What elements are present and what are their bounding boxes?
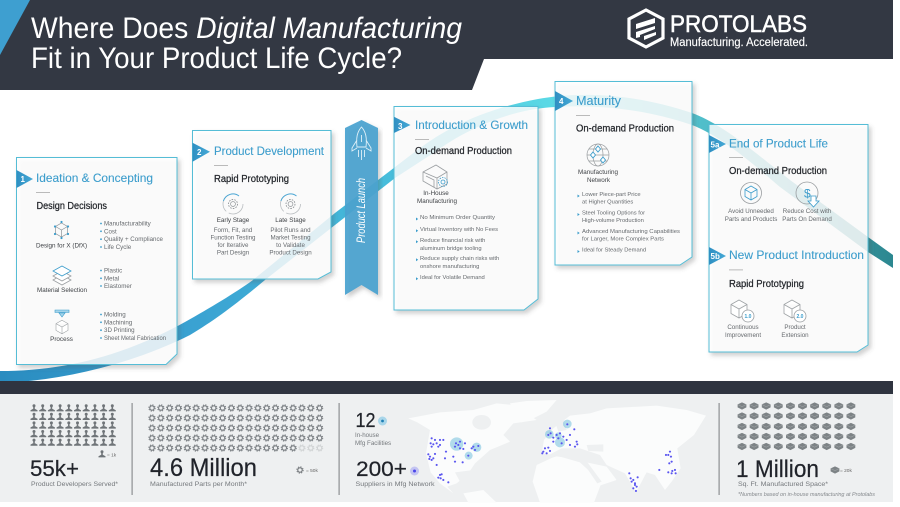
list: processes: 3D Printing [104, 327, 135, 334]
pictogram: building grid [738, 402, 855, 450]
step marker 1: 1 [20, 175, 26, 184]
list: benefits: aluminum bridge tooling [420, 246, 482, 252]
label: in-house manufacturing [417, 190, 457, 205]
heading: new product introduction: New Product Introduction [729, 248, 864, 262]
list: benefits: at Higher Quantities [582, 200, 633, 206]
list: design for x [100, 220, 164, 251]
captions: prototyping uses: Continuous [727, 324, 759, 331]
icon: network globe [587, 144, 609, 166]
step marker 4: 4 [559, 97, 564, 106]
text: early stage: for Iterative [218, 242, 249, 249]
map water: seas and bays [455, 415, 655, 495]
legend: fifty thousand: = 50k [306, 468, 318, 474]
captions: prototyping uses: Extension [781, 332, 809, 339]
text: early stage: Form, Fit, and [214, 227, 253, 234]
pictogram: gear grid [149, 405, 323, 451]
list: benefits: Steel Tooling Options for [582, 210, 645, 216]
list: benefits: No Minimum Order Quantity [420, 215, 495, 221]
icon: product extension cube: 2.0 [797, 314, 804, 320]
label: process: Process [50, 336, 73, 343]
list: processes: Machining [104, 319, 133, 326]
subheading: On-demand Production [576, 124, 674, 134]
icon: reduce cost [796, 182, 819, 207]
icon: product extension cube [784, 300, 806, 322]
list: materials [100, 268, 132, 290]
icon: reduce cost: $ [804, 186, 811, 200]
legend: twenty thousand: = 20k [840, 468, 852, 474]
title [31, 12, 463, 75]
text: late stage: Late Stage [275, 217, 306, 224]
figure: 4.6 Million [150, 454, 257, 482]
list: benefits: onshore manufacturing [420, 264, 479, 270]
list: benefits: Lower Piece-part Price [582, 192, 641, 198]
list: benefits: High-volume Production [582, 218, 644, 224]
figure: 12 [356, 410, 376, 432]
step marker 3 [394, 117, 410, 133]
heading: Ideation & Concepting [36, 171, 153, 185]
life cycle curve [0, 95, 893, 383]
icon: late stage cycle [280, 194, 300, 214]
panel: maturity [555, 82, 692, 265]
list: benefits: Ideal for Steady Demand [582, 248, 646, 254]
text: late stage: Product Design [269, 250, 312, 256]
text: late stage: Market Testing [270, 234, 311, 242]
Protolabs logo: PROTOLABS [670, 11, 807, 38]
captions: on-demand benefits: Parts and Products [725, 216, 777, 223]
header blue corner accent [0, 0, 30, 55]
captions: on-demand benefits: Reduce Cost with [783, 208, 832, 215]
list: materials: Metal [104, 275, 119, 282]
heading: Introduction & Growth [415, 118, 528, 132]
text: late stage [269, 217, 312, 256]
list: materials: Elastomer [104, 283, 132, 290]
list: benefits: Advanced Manufacturing Capabilities [582, 229, 680, 235]
list: benefits: Ideal for Volatile Demand [420, 275, 485, 281]
step marker 3: 3 [398, 122, 403, 131]
text: early stage: Part Design [217, 250, 250, 256]
world map [408, 400, 706, 503]
list: materials: Plastic [104, 268, 122, 274]
in-house facility halos [450, 420, 572, 460]
step marker 1 [16, 170, 33, 188]
subheading: On-demand Production [415, 146, 512, 157]
stats band [0, 381, 893, 502]
list: processes: Molding [104, 312, 126, 318]
list: benefits: for Larger, More Complex Parts [582, 236, 664, 242]
captions: on-demand benefits [725, 208, 832, 223]
list: benefits: Reduce financial risk with [420, 238, 485, 244]
list: design for x: Cost [104, 228, 117, 235]
legend dot: supplier [410, 466, 419, 476]
step marker 5a [709, 135, 726, 153]
icon: continuous improvement cube: 1.0 [745, 314, 752, 320]
caption: Sq. Ft. Manufactured Space* [738, 481, 829, 488]
Protolabs logo: Manufacturing. Accelerated. [670, 37, 808, 49]
label: in-house manufacturing: In-House [423, 190, 449, 197]
supplier dots [427, 423, 677, 492]
list: processes [100, 312, 167, 342]
list: design for x: Manufacturability [104, 220, 152, 228]
subheading: on-demand production: On-demand Production [729, 166, 827, 177]
legend: fifty thousand [297, 467, 318, 474]
icon: factory [423, 165, 448, 189]
caption [355, 432, 391, 447]
subheading: Design Decisions [36, 201, 107, 212]
icon: continuous improvement cube [731, 300, 754, 322]
figure: 1 Million [736, 456, 819, 483]
caption: Product Developers Served* [31, 481, 119, 488]
caption: In-house [355, 432, 380, 439]
heading: Maturity [576, 93, 621, 108]
step marker 5b [709, 247, 726, 265]
legend: one thousand: = 1k [107, 452, 117, 458]
footnote: *Numbers based on in-house manufacturing at Protolabs [738, 492, 876, 498]
title: Fit in Your Product Life Cycle? [31, 42, 402, 75]
label: in-house manufacturing: Manufacturing [417, 198, 457, 205]
icon: rocket [352, 127, 371, 160]
pictogram: people grid [30, 404, 116, 446]
step marker 5a: 5a [710, 140, 720, 150]
label: manufacturing network: Manufacturing [578, 169, 618, 176]
label: manufacturing network [578, 169, 618, 184]
list: benefits [578, 192, 680, 254]
subheading: rapid prototyping: Rapid Prototyping [729, 279, 804, 290]
text: early stage [211, 217, 256, 256]
subheading: Rapid Prototyping [214, 174, 289, 185]
icon: avoid unneeded parts [740, 182, 762, 204]
step marker 2: 2 [197, 148, 202, 157]
stat: in-house facilities [355, 410, 391, 447]
text: late stage: Pilot Runs and [270, 227, 311, 234]
text: early stage: Early Stage [217, 217, 250, 224]
label: design for x: Design for X (DfX) [36, 242, 87, 250]
list: design for x: Quality + Compliance [104, 236, 164, 243]
label: manufacturing network: Network [587, 177, 611, 184]
list: benefits [416, 215, 499, 281]
captions: prototyping uses [725, 324, 809, 339]
Protolabs logo [629, 10, 808, 49]
list: benefits: Reduce supply chain risks with [420, 256, 499, 262]
text: early stage: Function Testing [211, 234, 256, 242]
icon: design for X cube [54, 221, 69, 239]
stat: product developers [30, 404, 119, 488]
panel: introduction and growth [394, 106, 538, 310]
captions: prototyping uses: Product [784, 324, 806, 331]
caption: Manufactured Parts per Month* [150, 481, 248, 488]
captions: on-demand benefits: Parts On Demand [782, 216, 832, 223]
figure: 55k+ [30, 456, 79, 481]
label: material selection: Material Selection [37, 287, 88, 294]
figure: 200+ [356, 458, 407, 481]
caption: Suppliers in Mfg Network [356, 481, 436, 488]
panel: product development [192, 130, 331, 279]
product launch ribbon [345, 120, 378, 295]
icon: process printer and cube [55, 310, 69, 334]
captions: on-demand benefits: Avoid Unneeded [728, 208, 774, 215]
text: late stage: to Validate [276, 242, 305, 249]
list: benefits: Virtual Inventory with No Fees [420, 227, 498, 233]
stat: manufactured space [736, 402, 876, 498]
step marker 4 [555, 91, 573, 111]
caption: Mfg Facilities [355, 440, 391, 447]
legend dot: facility [378, 416, 387, 426]
header banner [0, 0, 893, 90]
step marker 2 [192, 143, 210, 162]
title: Where Does Digital Manufacturing [31, 12, 463, 45]
label: Product Launch [356, 178, 368, 243]
heading: Product Development [214, 144, 325, 158]
list: processes: Sheet Metal Fabrication [104, 335, 167, 342]
step marker 5b: 5b [710, 252, 720, 261]
panel: end of life and new product introduction [709, 124, 868, 352]
stat: suppliers [356, 458, 436, 488]
panel: ideation and concepting [16, 158, 177, 364]
list: design for x: Life Cycle [104, 244, 132, 251]
icon: material layers [53, 266, 71, 285]
heading: end of product life: End of Product Life [729, 136, 828, 150]
stat: manufactured parts [149, 405, 323, 488]
icon: early stage cycle [223, 194, 243, 214]
captions: prototyping uses: Improvement [725, 332, 761, 339]
